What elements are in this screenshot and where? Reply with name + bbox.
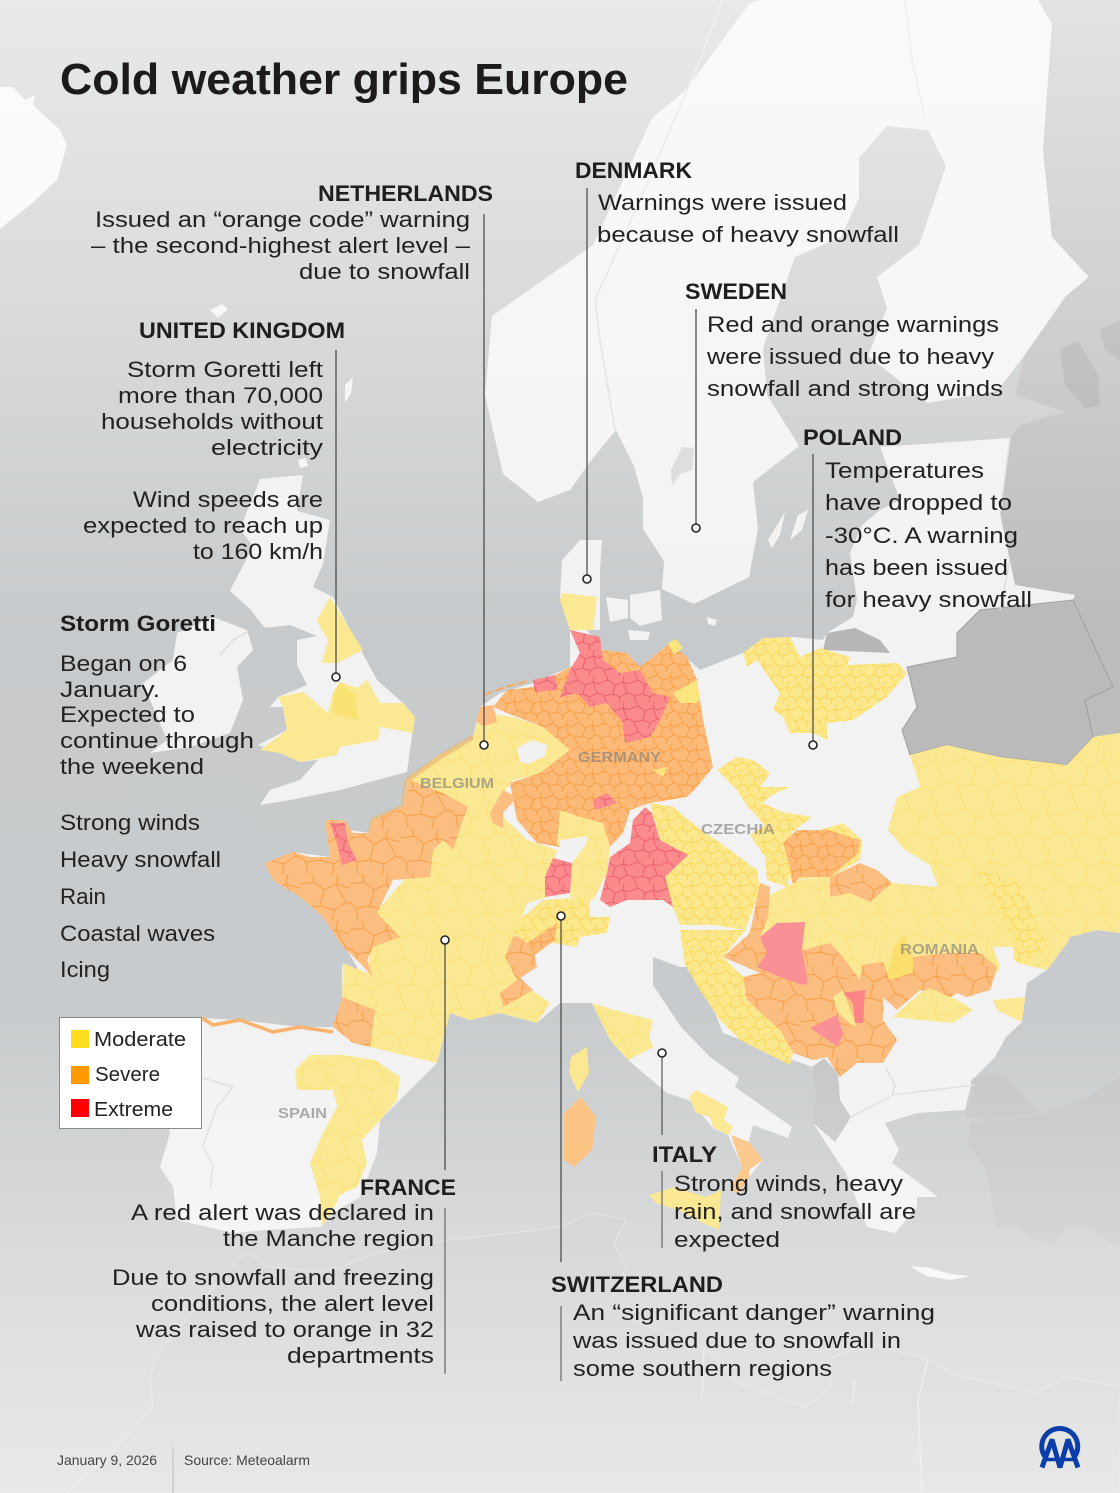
legend item: severe: Severe xyxy=(95,1064,160,1086)
severe: southern Poland, Slovakia xyxy=(783,830,860,887)
leader line xyxy=(480,214,488,749)
callout: Poland: has been issued xyxy=(825,555,1008,580)
callout: France: conditions, the alert level xyxy=(151,1291,434,1316)
moderate: Romania darker area xyxy=(887,935,913,980)
severe: Rhineland arc xyxy=(490,790,517,828)
severe: Frisian islands xyxy=(484,681,528,695)
callout: Poland: Temperatures xyxy=(825,458,984,483)
severe: north-east Hungary xyxy=(830,863,892,902)
leader line xyxy=(809,454,817,749)
leader line xyxy=(658,1049,666,1248)
warning map: coloured alert regions xyxy=(202,593,1120,1230)
callout: Italy: expected xyxy=(674,1227,780,1252)
extreme: Kosovo area xyxy=(810,1015,843,1047)
callout: United Kingdom: households without xyxy=(101,409,323,434)
Kaliningrad xyxy=(823,628,890,653)
callout: Poland: -30°C. A warning xyxy=(825,523,1018,548)
callout: United Kingdom: more than 70,000 xyxy=(118,383,323,408)
severe: Germany xyxy=(493,643,713,847)
callout: Italy: rain, and snowfall are xyxy=(674,1199,916,1224)
moderate: East Germany coast xyxy=(653,639,700,777)
map country labels xyxy=(278,749,979,1122)
severe: Croatia, Serbia, Romania xyxy=(723,883,997,1077)
text block: Storm Goretti xyxy=(60,611,254,779)
callout: United Kingdom: Storm Goretti left xyxy=(127,357,323,382)
land: Africa xyxy=(67,1213,1120,1493)
list: storm hazards: Rain xyxy=(60,884,106,909)
text block: Storm Goretti: continue through xyxy=(60,728,254,753)
moderate: central England overlap xyxy=(333,682,358,720)
leader line xyxy=(583,188,591,583)
callout: United Kingdom: Wind speeds are xyxy=(133,487,323,512)
callout: Denmark: DENMARK xyxy=(575,158,692,183)
callout: France: departments xyxy=(287,1343,434,1368)
Turkey, Anatolia xyxy=(967,1077,1120,1250)
moderate: Ukraine xyxy=(888,733,1120,943)
title: Cold weather grips Europe xyxy=(60,55,628,104)
moderate: Bulgaria xyxy=(893,988,973,1023)
extreme: Serbia xyxy=(843,990,865,1023)
callout: Denmark: Warnings were issued xyxy=(598,190,847,215)
leader line xyxy=(557,912,565,1381)
callout: Netherlands: NETHERLANDS xyxy=(318,181,493,206)
callout: United Kingdom xyxy=(83,318,345,681)
Russia xyxy=(1000,0,1120,737)
callout: France: was raised to orange in 32 xyxy=(135,1317,434,1342)
callout: France: Due to snowfall and freezing xyxy=(112,1265,434,1290)
leader line xyxy=(441,936,449,1374)
land: Iceland xyxy=(0,87,67,229)
callout: Switzerland: SWITZERLAND xyxy=(551,1272,723,1297)
moderate: Slovenia and Croatia xyxy=(680,930,793,1065)
severe: Zeeland and Holland xyxy=(476,705,497,726)
land gap: Basel xyxy=(560,836,588,858)
severe: France north-west xyxy=(265,780,468,977)
callout: United Kingdom: electricity xyxy=(211,435,323,460)
callout: Netherlands xyxy=(91,181,493,749)
callout: Netherlands: due to snowfall xyxy=(299,259,470,284)
severe: French Alps xyxy=(500,933,537,1007)
moderate: Czechia and Slovakia xyxy=(717,757,812,887)
callout: Italy xyxy=(652,1049,916,1252)
land: continental Europe xyxy=(160,438,1120,1233)
lakes in Russia xyxy=(1060,320,1120,408)
extreme: East Frisia xyxy=(533,675,558,692)
legend item: moderate: Moderate xyxy=(94,1029,186,1051)
land: Ireland xyxy=(143,617,253,753)
Belarus xyxy=(902,600,1113,765)
callout: Poland: have dropped to xyxy=(825,490,1012,515)
moderate: Britain xyxy=(260,597,415,762)
Albania xyxy=(812,1058,851,1142)
label: Spain: SPAIN xyxy=(278,1105,327,1122)
moderate: northern Poland xyxy=(743,637,907,740)
moderate: Sicily xyxy=(649,1187,721,1230)
extreme: Croatia and Bosnia xyxy=(757,922,808,985)
list: storm hazards xyxy=(60,810,221,982)
text block: Storm Goretti: Storm Goretti xyxy=(60,611,216,636)
land gap: Luxembourg xyxy=(517,740,547,764)
callout: Sweden: snowfall and strong winds xyxy=(707,376,1003,401)
list: storm hazards: Coastal waves xyxy=(60,921,215,946)
callout: United Kingdom: expected to reach up xyxy=(83,513,323,538)
callout: Sweden: were issued due to heavy xyxy=(706,344,994,369)
text block: Storm Goretti: Expected to xyxy=(60,702,195,727)
leader line xyxy=(692,309,700,532)
lake in Sweden xyxy=(671,447,694,486)
callout: Poland xyxy=(803,425,1032,749)
callout: Switzerland: was issued due to snowfall in xyxy=(572,1328,901,1353)
callout: Italy: Strong winds, heavy xyxy=(674,1171,903,1196)
severe: Sardinia xyxy=(564,1097,596,1167)
callout: Sweden: Red and orange warnings xyxy=(707,312,999,337)
severe: Aquitaine xyxy=(333,997,375,1047)
callout: United Kingdom: UNITED KINGDOM xyxy=(139,318,345,343)
label: Germany: GERMANY xyxy=(578,749,661,766)
Turkey, Europe xyxy=(965,1073,1042,1120)
callout: Denmark: because of heavy snowfall xyxy=(597,222,899,247)
footer: date and source: January 9, 2026 xyxy=(57,1452,157,1468)
moderate: southern Italy xyxy=(689,1090,733,1135)
list: storm hazards: Icing xyxy=(60,957,110,982)
label: Czechia: CZECHIA xyxy=(701,821,775,838)
callout: Poland: POLAND xyxy=(803,425,902,450)
list: storm hazards: Heavy snowfall xyxy=(60,847,221,872)
moderate: Serbia inner area xyxy=(833,990,857,1027)
callout: Denmark xyxy=(575,158,899,583)
callout: United Kingdom: to 160 km/h xyxy=(193,539,323,564)
moderate: France, Benelux xyxy=(342,713,570,1063)
severe: Spanish north coast xyxy=(202,1018,333,1032)
extreme: Manche xyxy=(330,823,357,865)
moderate: Corsica xyxy=(569,1047,589,1092)
moderate: Dobruja xyxy=(993,997,1025,1022)
extreme: central Germany xyxy=(593,793,617,810)
moderate: Austria and Bohemia xyxy=(650,803,760,930)
callout: Italy: ITALY xyxy=(652,1142,717,1167)
callout: France: the Manche region xyxy=(223,1226,434,1251)
land: Britain xyxy=(230,475,415,805)
moderate: Hungary and Romania xyxy=(745,870,1067,1000)
legend item: extreme: Extreme xyxy=(94,1099,173,1121)
moderate: Spain xyxy=(295,1055,400,1225)
label: Romania: ROMANIA xyxy=(900,941,979,958)
label: Belgium: BELGIUM xyxy=(420,775,494,792)
leader line xyxy=(332,350,340,681)
callout: France: FRANCE xyxy=(360,1175,456,1200)
callout: France: A red alert was declared in xyxy=(131,1200,434,1225)
land: Denmark xyxy=(560,540,717,640)
moderate: Tuscany xyxy=(592,1003,653,1060)
callout: Poland: for heavy snowfall xyxy=(825,587,1032,612)
land: Crete xyxy=(910,1266,971,1280)
footer: date and source: Source: Meteoalarm xyxy=(184,1452,310,1468)
land: Baltic islands xyxy=(768,510,808,548)
callout: Switzerland: some southern regions xyxy=(573,1356,832,1381)
callout: Switzerland: An “significant danger” warning xyxy=(573,1300,935,1325)
legend xyxy=(60,1018,202,1128)
moderate: Switzerland xyxy=(513,897,610,947)
national borders xyxy=(200,0,1010,1493)
severe: Swiss south-west xyxy=(527,923,557,955)
moderate: Moldova xyxy=(975,870,1050,962)
moderate: southern Poland xyxy=(790,823,862,880)
extreme: Alsace xyxy=(545,858,572,897)
severe: Calabria xyxy=(730,1135,763,1193)
severe: coastal band Belgium and Normandy xyxy=(370,737,473,833)
land: Scandinavia xyxy=(485,0,1089,604)
moderate: Denmark xyxy=(560,593,597,630)
list: storm hazards: Strong winds xyxy=(60,810,200,835)
icon: Anadolu Agency logo xyxy=(1042,1428,1078,1468)
callout: Sweden: SWEDEN xyxy=(685,279,787,304)
callout: Netherlands: – the second-highest alert level – xyxy=(91,233,471,258)
text block: Storm Goretti: January. xyxy=(60,677,160,702)
callout: Sweden xyxy=(685,279,1003,532)
moderate: Baden-Wurttemberg xyxy=(553,800,610,900)
callout: Netherlands: Issued an “orange code” warning xyxy=(95,207,470,232)
footer: date and source xyxy=(57,1447,310,1493)
text block: Storm Goretti: Began on 6 xyxy=(60,651,187,676)
text block: Storm Goretti: the weekend xyxy=(60,754,204,779)
extreme: northern Germany xyxy=(560,630,670,743)
callout: Switzerland xyxy=(551,912,935,1381)
extreme: Bavaria xyxy=(600,807,688,907)
land: small northern islands xyxy=(210,304,353,468)
callout: France xyxy=(112,936,456,1374)
